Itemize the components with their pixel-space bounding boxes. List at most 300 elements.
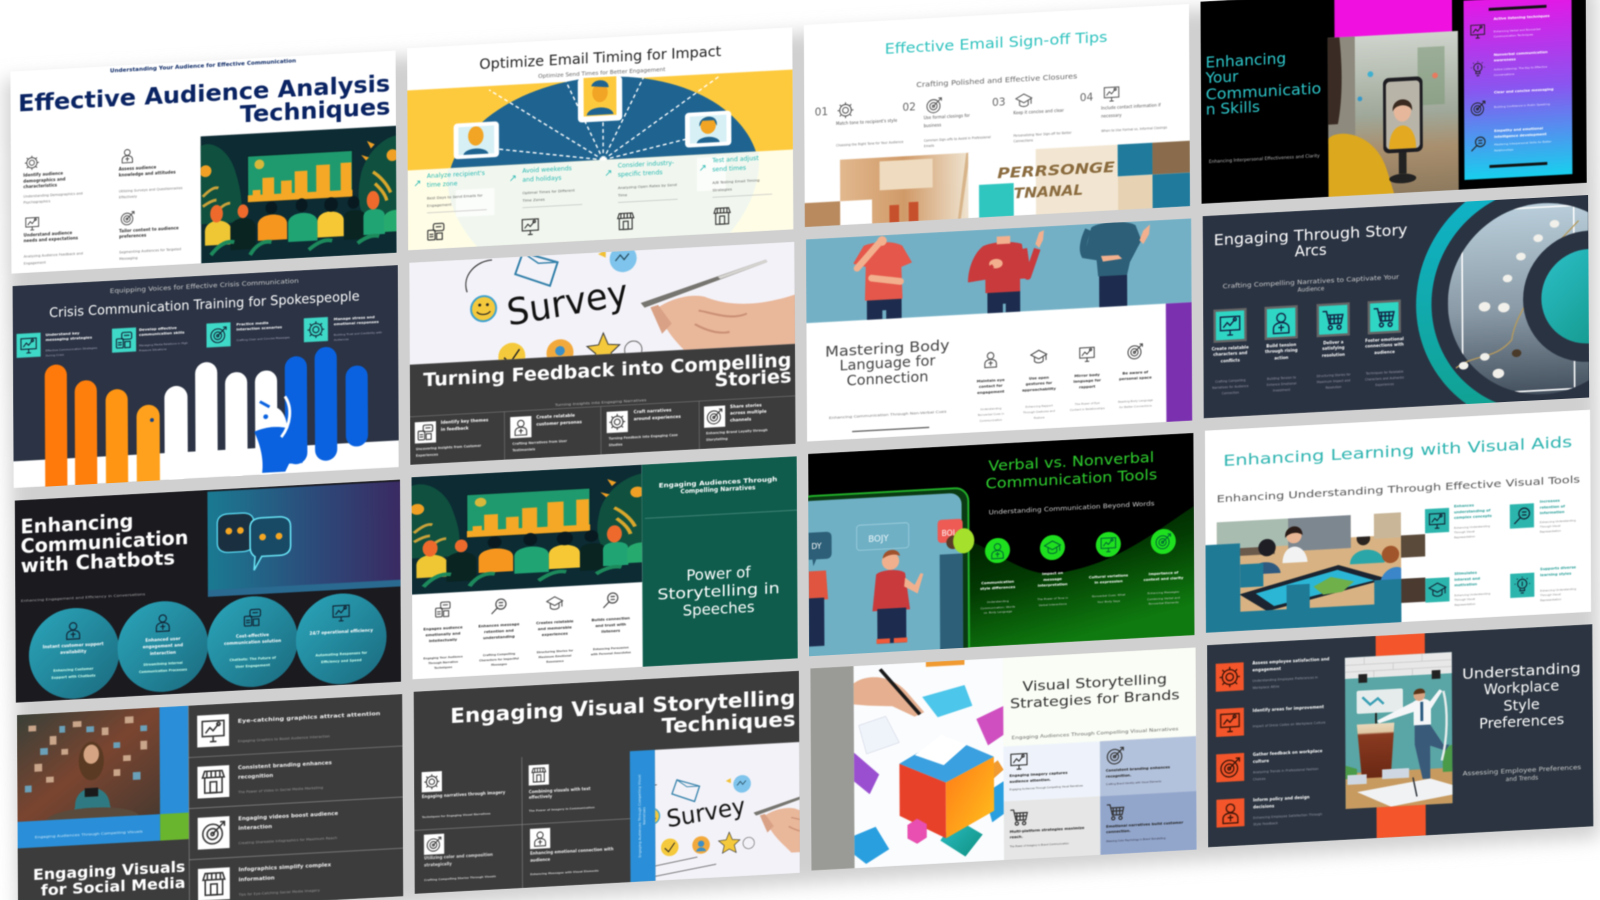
circle: cost-effective: Chatbots: The Future of <box>229 656 276 662</box>
title <box>1205 52 1322 116</box>
item: analyze <box>413 170 487 241</box>
subtitle: Crafting Compelling Narratives to Captivate Your <box>1223 275 1400 290</box>
item: tension: Building Tension to <box>1267 376 1296 381</box>
step 02: Emails <box>924 144 935 148</box>
subtitle: Assessing Employee Preferences <box>1463 764 1581 778</box>
item: analyze: time zone <box>427 180 458 189</box>
item: nonverbal <box>1471 50 1548 78</box>
item: industry: Analyzing Open Rates by Send <box>618 182 677 190</box>
item: satisfaction: engagement <box>1252 666 1281 672</box>
item: retention: Enhances message <box>478 621 520 629</box>
item: eye contact: contact for <box>979 383 1003 389</box>
slide: Power of Storytelling in Speeches <box>410 456 798 680</box>
item: complex concepts <box>1425 502 1493 541</box>
item: impact: The Power of Tone in <box>1036 596 1068 601</box>
circle: 24/7: Efficiency and Speed <box>321 658 362 664</box>
title <box>450 686 796 750</box>
item: weekends <box>509 165 582 236</box>
item: retention: Increases <box>1540 499 1561 504</box>
chatbot image <box>207 481 401 597</box>
item: characters: Narratives for Audience <box>1212 384 1249 390</box>
item: mirror: language for <box>1073 377 1101 384</box>
item: connection: and trust with <box>595 621 626 628</box>
item: feedback: culture <box>1253 758 1269 764</box>
circle: customer support: availability <box>60 649 87 655</box>
title: Power of <box>686 563 751 585</box>
slide: Mastering Body Language for Connection <box>806 218 1192 442</box>
item: empathy: Relationships <box>1494 147 1514 152</box>
item: style differences: Communication <box>981 579 1014 585</box>
item: memorable: and memorable <box>538 624 572 631</box>
item: complex concepts: Enhances <box>1454 503 1475 509</box>
item: empathy <box>1471 126 1552 154</box>
circle: engagement <box>117 599 208 694</box>
green block <box>160 813 189 841</box>
item: impact: interpretation <box>1038 582 1068 588</box>
purple block <box>1166 302 1192 422</box>
item: memorable: Resonance <box>546 659 564 664</box>
title: n Skills <box>1206 98 1260 119</box>
item: videos: interaction <box>238 824 272 832</box>
item: engages: Through Narrative <box>428 660 458 665</box>
item: connection <box>590 592 631 656</box>
photo collage <box>804 141 1190 227</box>
item: graphics: Engaging Graphics to Boost Audience Interaction <box>238 734 331 743</box>
title: Enhancing Learning with Visual Aids <box>1223 433 1572 470</box>
blue column <box>159 706 189 814</box>
cell: branding: recognition. <box>1106 773 1132 779</box>
item: tailor content: Segmenting Audiences for Targeted <box>119 247 181 254</box>
item: graphics: Eye-catching graphics attract attention <box>238 711 380 725</box>
item: impact: Verbal Interactions <box>1039 602 1067 607</box>
orange band <box>1376 633 1426 838</box>
item: eye contact <box>977 352 1005 423</box>
item: learning styles: Supports diverse <box>1540 565 1577 571</box>
cell: emotional: Weaving Color Psychology in Brand Storytelling <box>1106 836 1166 843</box>
grey strip <box>810 666 855 871</box>
item: retention: Messages <box>491 662 507 667</box>
illustration: colourful box <box>854 658 1004 868</box>
item: motivation: Representation <box>1454 602 1476 607</box>
item: complex concepts: Through Visual <box>1453 529 1475 535</box>
item: infographics: Tips for Eye-Catching Social Media Imagery <box>238 888 321 897</box>
item: tension: Enhance Emotional <box>1267 381 1296 387</box>
item: clear messaging <box>1471 87 1554 116</box>
item: context: context and clarity <box>1144 576 1184 582</box>
title <box>985 450 1157 492</box>
photo: iced drink and man <box>1345 652 1453 809</box>
slide: Effective Email Sign-off Tips <box>804 4 1190 227</box>
item: emotional connections <box>1364 300 1405 388</box>
item: cultural: Nonverbal Cues: What <box>1092 593 1126 598</box>
subtitle: Understanding Your Audience for Effective Communication <box>110 59 297 75</box>
blue strip with vertical caption: Engaging Audiences Through Compelling Visual <box>638 775 642 858</box>
item: style differences: Communication: Words <box>980 604 1016 610</box>
item: identify audience: Understanding Demographics and <box>23 192 83 199</box>
item: manage stress: Manage stress and <box>334 314 375 321</box>
item: narratives <box>422 768 506 819</box>
title <box>825 338 950 391</box>
step 03: 03 <box>992 95 1006 109</box>
blue strip with vertical caption: Narratives <box>643 807 647 825</box>
item: key themes: Identify key themes <box>441 417 489 425</box>
subtitle <box>1223 275 1400 298</box>
item: retention <box>478 598 520 667</box>
item: understand needs: Understand audience <box>24 230 73 238</box>
photo: woman surrounded by images <box>17 707 160 822</box>
cell: multi-platform: Multi-platform strategies maximize <box>1010 826 1085 834</box>
item: style differences: style differences <box>980 585 1016 591</box>
cell: emotional: Emotional narratives build customer <box>1106 820 1183 829</box>
subtitle: Enhancing Interpersonal Effectiveness and Clarity <box>1209 153 1320 165</box>
item: tailor content: Messaging <box>119 256 138 261</box>
title: Communication <box>21 526 188 558</box>
item: test <box>699 154 772 225</box>
circle: 24/7: Automating Responses for <box>315 651 368 658</box>
item: empathy: intelligence development <box>1494 132 1547 139</box>
title <box>657 562 780 621</box>
title: Mastering Body <box>825 338 950 361</box>
step 02: Use formal closings for <box>924 113 970 121</box>
underline <box>852 427 929 432</box>
item: personal space: for Better Connections <box>1119 404 1152 409</box>
item: key themes: Experiences <box>416 453 438 458</box>
circle: customer support <box>29 606 120 701</box>
subtitle: Engaging Audiences Through Compelling Visual Narratives <box>1012 726 1179 741</box>
item: motivation: Stimulates <box>1454 571 1478 576</box>
item: characters: Connection <box>1222 390 1239 395</box>
item: retention <box>1510 498 1576 535</box>
item: tension: action <box>1274 355 1289 361</box>
item: nonverbal: Nonverbal communication <box>1494 50 1548 57</box>
item: memorable: Creates relatable <box>536 619 574 626</box>
item: emotional connections: audience <box>1374 349 1395 355</box>
item: satisfaction: Assess employee satisfaction and <box>1252 657 1330 666</box>
item: complex concepts: understanding of <box>1454 508 1491 514</box>
item: industry: specific trends <box>618 169 663 178</box>
item: mirror: Mirror body <box>1074 372 1100 378</box>
item: open gestures: Use open <box>1029 374 1049 381</box>
step 04 <box>1080 84 1167 134</box>
item: videos: Creating Shareable Infographics for Maximum Reach <box>238 836 338 846</box>
item: style differences <box>980 537 1016 615</box>
step 03 <box>992 91 1072 145</box>
item: retention: understanding <box>483 633 515 640</box>
item: active listening: Communication Techniques <box>1494 32 1534 39</box>
phone illustration <box>799 488 969 670</box>
item: weekends: Optimal Times for Different <box>522 187 575 195</box>
item: branding: recognition <box>238 773 273 781</box>
highlight dot <box>953 528 974 554</box>
slide: Enhancing Learning with Visual Aids <box>1205 410 1591 633</box>
blue band caption <box>17 814 160 848</box>
title: Engaging Visuals <box>33 858 185 884</box>
item: mirror <box>1070 347 1105 412</box>
item: context: Importance of <box>1149 570 1179 576</box>
item: connection: listeners <box>601 628 621 634</box>
title <box>33 858 186 900</box>
phone illustration: BOJY <box>868 534 889 545</box>
item: analyze: Best Days to Send Emails for <box>427 192 483 200</box>
item: retention: Through Visual <box>1539 524 1561 529</box>
title: Storytelling in <box>657 579 780 604</box>
item: identify audience: demographics and <box>23 176 66 184</box>
item: assess knowledge: Utilizing Surveys and Questionnaires <box>119 186 183 194</box>
grid lines <box>410 396 796 465</box>
title: Strategies for Brands <box>1010 687 1180 713</box>
item: messaging: messaging strategies <box>45 334 93 342</box>
item: engages: Engaging Your Audience <box>423 655 463 661</box>
item: context <box>1143 528 1184 606</box>
panel heading: Compelling Narratives <box>680 484 756 495</box>
item: motivation <box>1425 570 1491 608</box>
item: messaging: Understand key <box>45 330 80 337</box>
item: learning styles: Through Visual <box>1539 592 1561 597</box>
item: eye contact: Maintain eye <box>977 377 1005 383</box>
item: media practice <box>206 319 290 348</box>
circle: cost-effective <box>207 594 298 690</box>
item: identify audience: Identify audience <box>23 171 63 178</box>
item: learning styles: Enhancing Understanding <box>1540 587 1576 593</box>
item: cultural <box>1089 531 1129 604</box>
item: open gestures: Enhancing Rapport <box>1025 403 1054 409</box>
subtitle <box>1463 764 1581 785</box>
item: tension <box>1265 306 1298 393</box>
title <box>1462 661 1581 733</box>
item: colour: Crafting Compelling Stories Through Visuals <box>424 874 496 882</box>
item: characters: Crafting Compelling <box>1215 378 1246 384</box>
item: test: Strategies <box>712 186 732 193</box>
survey photo <box>565 727 892 895</box>
yellow band with blue circle <box>407 68 794 250</box>
circle: engagement: Streamlining Internal <box>143 661 183 667</box>
photo sign text: TNANAL <box>1014 183 1083 202</box>
subtitle: and Trends <box>1506 774 1538 783</box>
item: memorable: experiences <box>542 630 569 637</box>
item: assess knowledge: Assess audience <box>119 165 157 172</box>
item: emotional connections: connections with <box>1365 342 1404 349</box>
title <box>1214 221 1408 265</box>
item: open gestures: gestures for <box>1026 380 1052 386</box>
item: personal space: personal space <box>1119 375 1152 381</box>
item: colour <box>424 831 496 882</box>
item: emotional <box>530 824 614 876</box>
item: identify audience: Psychographics <box>23 199 51 205</box>
item: engages: Techniques <box>434 665 452 670</box>
title: Communicatio <box>1206 79 1321 104</box>
item: narratives: Engaging narratives through imagery <box>422 790 506 799</box>
item: infographics: Infographics simplify complex <box>238 863 332 874</box>
item: weekends: ↗ <box>509 173 517 184</box>
item: resolution: Deliver a <box>1323 339 1344 345</box>
item: tension: through rising <box>1265 348 1298 354</box>
item: branding <box>197 759 332 799</box>
item: connection: Enhancing Persuasion <box>593 645 629 651</box>
item: resolution: Resolution <box>1326 385 1342 390</box>
cell: imagery: Engaging imagery captures <box>1009 771 1068 778</box>
item: test: A/B Testing Email Timing <box>712 177 760 185</box>
item: retention: Representation <box>1540 529 1561 534</box>
item: colour: strategically <box>424 861 452 868</box>
circle: engagement: interaction <box>150 650 176 656</box>
slide: Verbal vs. Nonverbal Communication Tools <box>798 433 1195 670</box>
item: retention: information <box>1540 510 1565 515</box>
item: empathy: Empathy and emotional <box>1494 126 1543 133</box>
item: personas: Testimonials <box>512 448 535 453</box>
item: open gestures: Through Gestures and <box>1022 409 1055 415</box>
cell: emotional <box>1100 791 1197 855</box>
title: Visual Storytelling <box>1022 672 1167 695</box>
subtitle: Crafting Polished and Effective Closures <box>916 72 1078 89</box>
slide: Visual Storytelling Strategies for Brands <box>810 647 1197 871</box>
item: share stories: Share stories <box>730 402 762 409</box>
item: industry: Time <box>617 192 628 198</box>
item: graphics <box>197 706 381 747</box>
item: media practice: interaction scenarios <box>236 324 283 332</box>
item: personas: Crafting Narratives from User <box>512 439 567 446</box>
item: identify audience <box>23 153 83 205</box>
slide: Engaging Visuals for Social Media <box>17 694 403 900</box>
item: resolution: satisfying <box>1322 345 1345 351</box>
title: Techniques <box>240 94 390 129</box>
circle: customer support: Support with Chatbots <box>51 673 95 680</box>
item: communication skills <box>112 324 188 354</box>
item: policy: Inform policy and design <box>1253 795 1310 803</box>
item: open gestures: approachability <box>1022 386 1056 392</box>
item: industry: Consider industry- <box>618 160 674 170</box>
item: active listening: Enhancing Verbal and Nonverbal <box>1494 27 1541 34</box>
item: resolution: Structuring Stories for <box>1316 373 1351 379</box>
item: infographics <box>198 862 332 900</box>
slide: Effective Audience Analysis Techniques <box>10 50 399 274</box>
item: satisfaction: Workplace Attire <box>1252 684 1279 690</box>
item: satisfaction: Understanding Employee Preferences in <box>1252 675 1318 683</box>
circle: 24/7 <box>296 591 387 687</box>
item: feedback: Analyzing Trends in Professional Fashion <box>1253 767 1318 775</box>
item: resolution: Maximum Impact and <box>1317 379 1350 384</box>
item: emotional connections: Characters and Authentic <box>1365 376 1405 382</box>
photo: phone on stand <box>1328 31 1459 197</box>
title: Language for <box>839 353 935 375</box>
item: mirror: The Power of Eye <box>1074 401 1100 406</box>
item: experiences: around experiences <box>634 414 681 422</box>
step 01: Match tone to recipient's style <box>836 118 898 126</box>
item: characters: conflicts <box>1221 357 1240 364</box>
step 01: 01 <box>815 105 828 119</box>
subtitle: Turning Insights into Engaging Narratives <box>554 398 647 407</box>
item: learning styles: Representation <box>1540 597 1562 602</box>
item: assess knowledge: knowledge and attitudes <box>119 169 176 177</box>
item: cultural: Cultural variations <box>1089 573 1129 579</box>
blue strip with vertical caption <box>630 750 656 882</box>
title: Style <box>1503 697 1540 715</box>
step 03: Keep it concise and clear <box>1013 108 1064 116</box>
item: infographics: information <box>238 875 275 883</box>
item: visuals with text: Combining visuals with text <box>529 786 591 794</box>
avatar card centre <box>578 76 622 123</box>
item: personas: customer personas <box>536 419 582 427</box>
item: share stories <box>704 402 768 442</box>
title: Stories <box>714 367 792 392</box>
item: memorable: Maximum Emotional <box>538 653 571 659</box>
title: Enhancing <box>20 510 133 539</box>
item: eye contact: Communication <box>980 417 1002 423</box>
subtitle: Equipping Voices for Effective Crisis Communication <box>110 279 299 295</box>
item: learning styles <box>1510 565 1577 604</box>
item: messaging <box>17 329 98 359</box>
item: connection: with Personal Anecdotes <box>591 650 631 656</box>
item: assess knowledge <box>119 147 183 200</box>
item: visuals with text: effectively <box>529 794 552 800</box>
item: colour: Utilizing color and composition <box>424 852 493 861</box>
circle: 24/7: 24/7 operational efficiency <box>309 627 373 636</box>
step 02 <box>902 95 991 150</box>
cell: imagery: Engaging Audiences Through Compelling Visual Narratives <box>1009 783 1084 792</box>
item: experiences: Craft narratives <box>634 407 672 414</box>
item: policy: Style Feedback <box>1253 821 1278 827</box>
figure right <box>1083 220 1150 308</box>
figure left <box>853 234 912 321</box>
item: motivation: interest and <box>1454 576 1480 582</box>
title: Crisis Communication Training for Spokespeople <box>49 289 360 322</box>
item: share stories: Storytelling <box>706 437 728 442</box>
panel heading <box>659 476 777 496</box>
item: emotional: Enhancing Messages with Visual Elements <box>530 868 599 876</box>
step 04: necessary <box>1101 112 1122 119</box>
item: eye contact: Understanding <box>980 406 1002 411</box>
item: open gestures <box>1022 349 1057 420</box>
magenta block <box>1334 0 1452 39</box>
title: Workplace <box>1484 678 1559 699</box>
photo sign text <box>997 160 1115 199</box>
item: retention: Crafting Compelling <box>483 652 515 657</box>
item: share stories: channels <box>730 416 752 423</box>
item: key themes: Uncovering Insights from Customer <box>416 444 482 451</box>
title: Turning Feedback into Compelling <box>423 350 792 391</box>
item: motivation: motivation <box>1454 582 1477 588</box>
item: nonverbal: awareness <box>1494 57 1516 63</box>
item: engages: emotionally and <box>425 630 461 637</box>
title: Preferences <box>1479 712 1564 733</box>
item: policy: decisions <box>1253 803 1275 809</box>
cell: imagery: audience attention. <box>1009 778 1052 784</box>
item: tailor content: Tailor content to audience <box>119 225 179 233</box>
circle: engagement: Enhanced user <box>145 636 181 643</box>
step 03: Connections <box>1013 139 1033 144</box>
cell: imagery <box>1003 741 1100 801</box>
item: cultural: Your Body Says <box>1097 599 1121 604</box>
circle: customer support: Instant customer support <box>43 641 104 649</box>
item: motivation: Enhancing Understanding <box>1454 591 1491 597</box>
title: Engaging Visual Storytelling <box>450 686 795 728</box>
item: videos: Engaging videos boost audience <box>238 811 339 822</box>
subtitle: Enhancing Communication Through Non-Verbal Cues <box>829 409 947 420</box>
item: characters <box>1211 309 1249 396</box>
item: resolution <box>1316 303 1351 390</box>
item: messaging: Effective Communication Strategies <box>46 346 98 353</box>
gradient panel <box>1464 0 1572 180</box>
item: tension: Investment <box>1273 388 1291 393</box>
item: nonverbal: Conversations <box>1494 72 1515 77</box>
item: personal space: Reading Body Language <box>1118 398 1153 404</box>
step 04: 04 <box>1080 91 1094 104</box>
item: weekends: Avoid weekends <box>522 165 572 175</box>
title: with Chatbots <box>21 546 175 577</box>
slide: Engaging Visual Storytelling Techniques <box>414 666 892 900</box>
item: communication skills: Develop effective <box>139 325 177 332</box>
item: feedback <box>1216 748 1323 783</box>
panel bars <box>1489 5 1547 168</box>
